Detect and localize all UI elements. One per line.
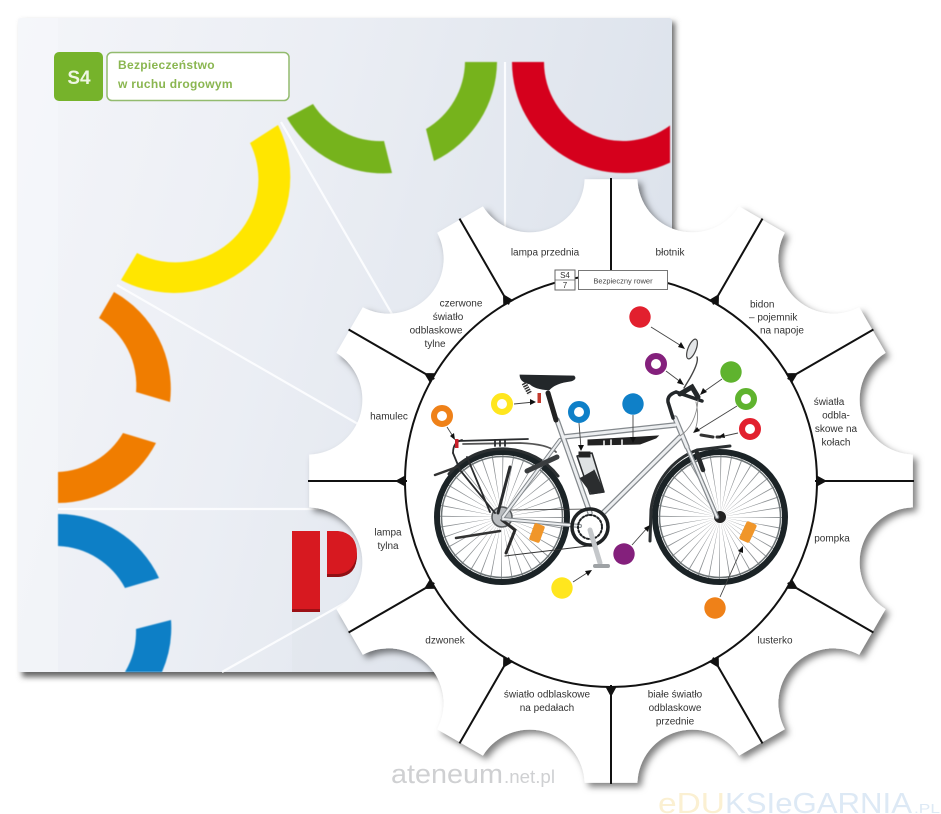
rear fender bbox=[449, 449, 558, 476]
green arc left bbox=[287, 104, 392, 173]
marker: yellow ring bbox=[494, 396, 510, 412]
arrow: dzwonek bbox=[666, 371, 684, 385]
marker: blue solid bbox=[622, 393, 644, 415]
watermark: eduksiegarnia.pl bbox=[658, 788, 940, 814]
blue arc upper bbox=[58, 514, 159, 588]
frame tubes bbox=[503, 418, 717, 526]
rear wheel bbox=[437, 452, 567, 582]
watermark: ateneum.net.pl: ateneum bbox=[391, 759, 503, 789]
card title box bbox=[578, 270, 668, 290]
label: białe światło odblaskowe przednie: białe światło bbox=[648, 690, 703, 700]
marker: purple solid bbox=[613, 543, 635, 565]
arrow: błotnik bbox=[632, 525, 650, 545]
arrow: światła na kołach bbox=[720, 546, 743, 597]
rear rack bbox=[453, 439, 556, 513]
mirror bbox=[684, 338, 700, 388]
handlebar and stem bbox=[668, 387, 702, 436]
section title: Bezpieczeństwo bbox=[118, 58, 215, 72]
watermark: ateneum.net.pl bbox=[391, 759, 555, 789]
label: czerwone światło odblaskowe tylne: odblaskowe bbox=[410, 326, 463, 336]
label: czerwone światło odblaskowe tylne: czerwone bbox=[440, 298, 483, 310]
marker: blue ring bbox=[571, 404, 587, 420]
arrow: bidon bbox=[578, 423, 584, 451]
arrow: lampa przednia bbox=[693, 406, 737, 433]
red arc bbox=[512, 62, 670, 173]
watermark: ateneum.net.pl: .net.pl bbox=[504, 767, 555, 787]
arrow: hamulec bbox=[700, 379, 722, 395]
label: bidon: bidon bbox=[750, 300, 774, 310]
label: czerwone światło odblaskowe tylne: światło bbox=[433, 312, 464, 323]
marker: orange solid bbox=[704, 597, 726, 619]
section badge S4 bbox=[54, 52, 103, 101]
label: światła odblaskowe na kołach: światła bbox=[814, 397, 845, 408]
wheel reflector bbox=[739, 521, 757, 543]
yellow arc bbox=[121, 125, 290, 293]
logo: red P bbox=[292, 531, 357, 612]
front fork crown bbox=[697, 453, 703, 470]
pointer arrows bbox=[447, 327, 743, 597]
coloured ring segments on panel bbox=[58, 62, 670, 672]
card number box: 7 bbox=[563, 281, 568, 290]
seat red light bbox=[538, 393, 541, 403]
label: światło odblaskowe na pedałach: na pedałach bbox=[520, 703, 574, 714]
marker: orange ring bbox=[434, 408, 450, 424]
brake bbox=[527, 457, 557, 471]
card number box: S4 bbox=[560, 271, 570, 280]
label: bidon: – pojemnik bbox=[749, 312, 798, 324]
radial white lines on panel bbox=[58, 62, 505, 672]
front fender bbox=[650, 446, 730, 541]
marker: red ring bbox=[742, 421, 758, 437]
label: białe światło odblaskowe przednie: odblaskowe bbox=[649, 703, 702, 714]
arrow: czerwone światło bbox=[514, 399, 536, 405]
label: światła odblaskowe na kołach: kołach bbox=[822, 438, 850, 448]
label: lampa tylna: lampa bbox=[374, 528, 402, 538]
pedal reflector bbox=[529, 523, 545, 543]
chainring bbox=[572, 509, 608, 545]
arrow: światło na pedałach bbox=[573, 570, 592, 582]
label: światła odblaskowe na kołach: skowe na bbox=[815, 424, 858, 435]
marker: purple ring bbox=[648, 356, 664, 372]
seat post bbox=[548, 393, 556, 420]
front wheel bbox=[655, 452, 785, 582]
marker: red solid bbox=[629, 306, 651, 328]
label: błotnik: błotnik bbox=[656, 248, 685, 258]
label: dzwonek: dzwonek bbox=[425, 636, 466, 646]
section badge S4: S4 bbox=[67, 68, 91, 89]
front light bracket bbox=[701, 435, 720, 437]
bicycle bbox=[435, 338, 785, 582]
gear disc bbox=[309, 179, 913, 783]
arrow: lusterko bbox=[651, 327, 685, 349]
label: lampa tylna: tylna bbox=[377, 541, 399, 552]
rear red light bbox=[455, 439, 458, 448]
orange arc lower bbox=[58, 433, 156, 503]
arrow: pompka bbox=[630, 415, 636, 443]
section title bbox=[107, 52, 289, 100]
green arc right bbox=[426, 62, 497, 161]
marker: green ring bbox=[738, 391, 754, 407]
marker: green solid bbox=[720, 361, 742, 383]
section title: w ruchu drogowym bbox=[117, 77, 233, 91]
marker: yellow solid bbox=[551, 577, 573, 599]
arrow: lampa tylna bbox=[447, 427, 455, 440]
label: pompka: pompka bbox=[814, 534, 850, 544]
rear mudflap bbox=[435, 467, 457, 475]
gear spokes bbox=[308, 178, 914, 784]
label: bidon: na napoje bbox=[760, 326, 804, 336]
pump on top tube bbox=[588, 436, 658, 445]
background panel bbox=[18, 18, 675, 677]
label: światło odblaskowe na pedałach: światło odblaskowe bbox=[504, 690, 591, 700]
central circle outline bbox=[405, 275, 817, 687]
part markers bbox=[434, 306, 758, 619]
label: czerwone światło odblaskowe tylne: tylne bbox=[424, 339, 446, 350]
label: światła odblaskowe na kołach: odbla- bbox=[822, 410, 850, 422]
arrow: białe światło bbox=[718, 433, 738, 438]
crank and pedal bbox=[590, 530, 608, 566]
label: hamulec: hamulec bbox=[370, 412, 408, 422]
label: białe światło odblaskowe przednie: przednie bbox=[656, 716, 695, 728]
chain and derailleur bbox=[456, 509, 590, 556]
water bottle bbox=[577, 452, 604, 494]
label: lusterko: lusterko bbox=[757, 636, 793, 646]
saddle bbox=[520, 375, 575, 394]
label: lampa przednia: lampa przednia bbox=[511, 248, 580, 258]
frame highlights bbox=[503, 418, 717, 526]
orange arc upper bbox=[99, 292, 171, 402]
card title box: Bezpieczny rower bbox=[593, 276, 653, 286]
card number box bbox=[555, 270, 575, 290]
blue arc lower bbox=[125, 620, 171, 672]
gear labels bbox=[370, 248, 858, 728]
